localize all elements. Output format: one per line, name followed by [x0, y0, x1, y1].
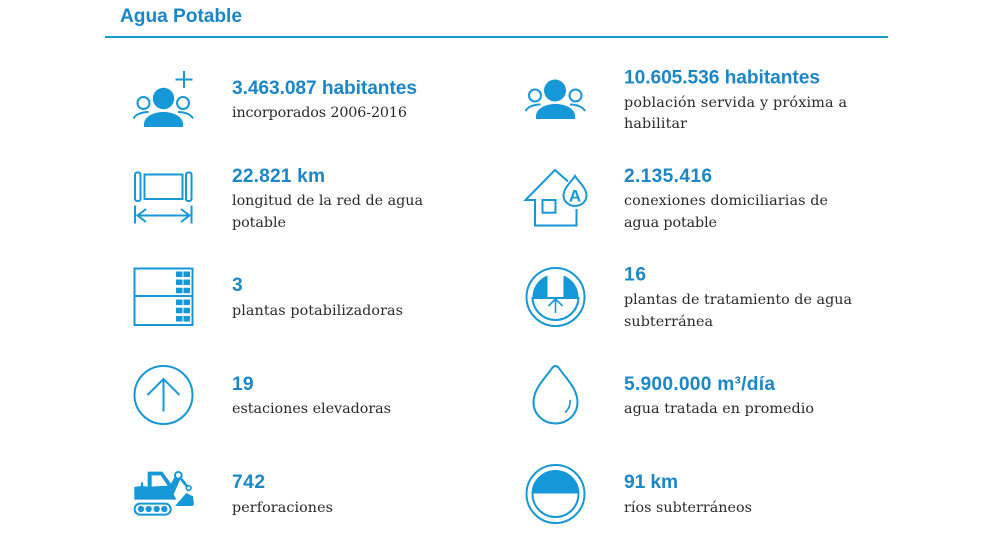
text: 2.135.416 — [624, 166, 828, 231]
text: 2.135.416: agua potable — [624, 215, 717, 231]
icon: excavator — [134, 472, 194, 515]
title: Agua Potable — [120, 6, 242, 27]
stat: población servida — [526, 68, 847, 132]
text: 19: estaciones elevadoras — [232, 401, 391, 417]
stat: habitantes incorporados — [134, 71, 417, 127]
icon: pipe with length arrow — [135, 172, 192, 224]
stat: ríos subterráneos — [526, 465, 752, 523]
text: 19 — [232, 374, 391, 417]
icon: house with water drop — [526, 170, 586, 226]
text: 91 km: 91 km — [624, 472, 678, 493]
text: 10.605.536 habitantes: 10.605.536 habitantes — [624, 68, 820, 88]
stat: plantas de tratamiento — [526, 264, 852, 330]
text: 3.463.087 habitantes: incorporados 2006-2016 — [232, 105, 407, 121]
text: 16: plantas de tratamiento de agua — [624, 292, 852, 308]
text: 5.900.000 m³/día: 5.900.000 m³/día — [624, 374, 775, 395]
text: 3: plantas potabilizadoras — [232, 303, 403, 319]
text: 22.821 km: 22.821 km — [232, 166, 325, 187]
text: 16 — [624, 264, 852, 330]
text: 3: 3 — [232, 275, 243, 296]
text: 5.900.000 m³/día: agua tratada en promedio — [624, 401, 814, 417]
icon: people with plus — [134, 71, 193, 127]
text: 91 km — [624, 472, 752, 516]
icon: plant floor plan — [134, 268, 192, 325]
text: 10.605.536 habitantes: habilitar — [624, 116, 687, 132]
text: 5.900.000 m³/día — [624, 374, 814, 417]
text: 19: 19 — [232, 374, 254, 395]
stat: longitud de la red — [135, 166, 423, 231]
text: 16: 16 — [624, 264, 646, 286]
text: 22.821 km — [232, 166, 423, 231]
icon: house with water drop: A — [569, 186, 581, 206]
text: 742: perforaciones — [232, 500, 333, 516]
icon: treatment plant circle — [526, 268, 584, 326]
text: 2.135.416: conexiones domiciliarias de — [624, 193, 828, 209]
text: 91 km: ríos subterráneos — [624, 500, 752, 516]
text: 22.821 km: longitud de la red de agua — [232, 193, 423, 209]
stat: conexiones domiciliarias — [526, 166, 828, 231]
text: 3 — [232, 275, 403, 319]
text: 10.605.536 habitantes — [624, 68, 847, 132]
stat: estaciones elevadoras — [134, 366, 391, 424]
text: 22.821 km: potable — [232, 215, 286, 231]
text: 2.135.416: 2.135.416 — [624, 166, 712, 187]
icon: up arrow in circle — [134, 366, 192, 424]
text: 16: subterránea — [624, 314, 713, 330]
text: 742: 742 — [232, 472, 265, 493]
icon: water drop — [534, 366, 578, 424]
stat: plantas potabilizadoras — [134, 268, 403, 325]
text: 3.463.087 habitantes: 3.463.087 habitantes — [232, 78, 417, 99]
stat: agua tratada — [534, 366, 814, 424]
text: 3.463.087 habitantes — [232, 78, 417, 121]
icon: half-filled circle — [526, 465, 584, 523]
stat: perforaciones — [134, 472, 333, 516]
text: 10.605.536 habitantes: población servida y próxima a — [624, 95, 847, 111]
icon: people — [526, 80, 585, 119]
text: 742 — [232, 472, 333, 516]
